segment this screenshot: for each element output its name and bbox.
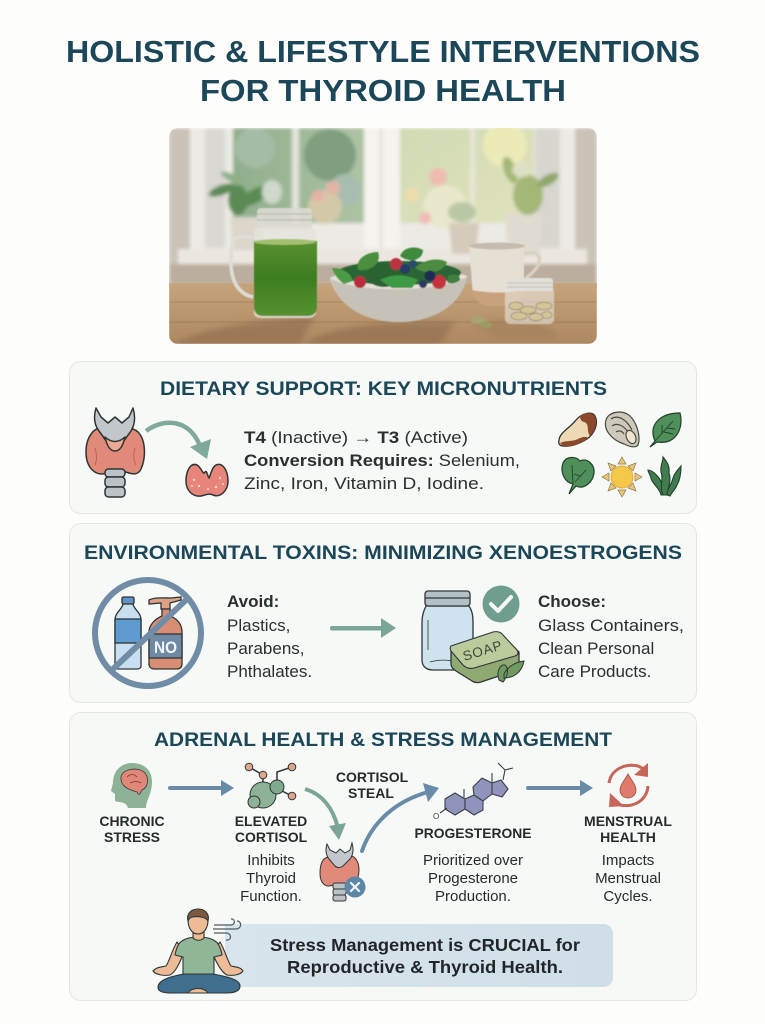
label: elevated cortisol: Inhibits: [247, 852, 295, 869]
arrow: cortisol steal: [362, 783, 439, 851]
panel: environmental toxins: [70, 524, 696, 702]
label: elevated cortisol: CORTISOL: [235, 829, 308, 845]
photo: healthy breakfast table by window: [169, 123, 597, 344]
arrow: progesterone to menstrual: [526, 780, 593, 796]
callout: stress management: [225, 924, 613, 987]
icon: glass jar: [422, 591, 473, 670]
icon: bottle and pump crossed out: [95, 580, 201, 686]
text: choose: Care Products.: [538, 662, 651, 681]
callout: stress management: Stress Management is CRUCIAL for: [270, 935, 580, 955]
icon: soap bar: SOAP: [461, 638, 504, 664]
text: avoid: Avoid:: [227, 592, 279, 611]
icon: leaf: [650, 413, 681, 447]
label: menstrual health: Impacts: [602, 852, 654, 869]
icon: menstrual cycle: [609, 763, 648, 807]
text: conversion: Conversion Requires: Selenium,: [244, 451, 520, 470]
label: menstrual health: [584, 813, 672, 905]
title: FOR THYROID HEALTH: [200, 73, 566, 108]
icon: progesterone molecule: O: [433, 812, 439, 821]
arrow: stress to cortisol: [168, 780, 234, 796]
label: elevated cortisol: ELEVATED: [235, 813, 307, 829]
callout: stress management: Reproductive & Thyroid Health.: [287, 957, 563, 977]
icon: check badge: [482, 586, 520, 622]
icon: breath lines: [213, 919, 241, 940]
text: avoid: Phthalates.: [227, 662, 312, 681]
icon: oyster: [605, 412, 639, 447]
text: choose: Choose:: [538, 592, 606, 611]
label: menstrual health: Cycles.: [603, 888, 653, 905]
label: progesterone: Progesterone: [428, 870, 518, 887]
label: progesterone: Prioritized over: [423, 852, 523, 869]
label: menstrual health: MENSTRUAL: [584, 813, 672, 829]
arrow: T4 to T3: [146, 423, 211, 459]
icon: head with brain: [111, 763, 152, 808]
text: avoid: Plastics,: [227, 616, 290, 635]
icon: bottle and pump crossed out: NO: [154, 638, 177, 657]
icon: progesterone molecule: [433, 763, 513, 821]
icon: spinach: [562, 457, 594, 494]
text: avoid: [227, 592, 312, 681]
text: avoid: Parabens,: [227, 639, 304, 658]
icon: inhibited thyroid: [320, 843, 366, 901]
icon: brazil nut: [559, 413, 596, 447]
title: [66, 34, 700, 108]
text: choose: Glass Containers,: [538, 616, 684, 635]
text: choose: [538, 592, 684, 681]
icon: soap bar: [450, 632, 524, 683]
text: conversion: Zinc, Iron, Vitamin D, Iodine.: [244, 474, 484, 493]
label: elevated cortisol: [235, 813, 308, 905]
heading: dietary support: DIETARY SUPPORT: KEY MICRONUTRIENTS: [160, 378, 607, 400]
text: choose: Clean Personal: [538, 639, 654, 658]
heading: adrenal health: ADRENAL HEALTH & STRESS MANAGEMENT: [154, 729, 612, 751]
panel: adrenal health: [70, 712, 696, 1000]
label: cortisol steal: [336, 769, 409, 801]
heading: environmental toxins: ENVIRONMENTAL TOXINS: MINIMIZING XENOESTROGENS: [84, 542, 682, 564]
label: progesterone: Production.: [435, 888, 511, 905]
label: elevated cortisol: Thyroid: [246, 870, 296, 887]
label: progesterone: [414, 825, 532, 905]
label: cortisol steal: STEAL: [348, 785, 394, 801]
icon: kelp: [648, 457, 681, 496]
label: cortisol steal: CORTISOL: [336, 769, 409, 785]
label: elevated cortisol: Function.: [240, 888, 302, 905]
icon: small thyroid: [186, 464, 228, 496]
panel: dietary support: [70, 362, 696, 514]
arrow: cortisol to thyroid: [305, 789, 346, 840]
icon: meditating person: [153, 909, 243, 993]
label: menstrual health: Menstrual: [595, 870, 661, 887]
label: menstrual health: HEALTH: [600, 829, 656, 845]
text: conversion: T4 (Inactive) → T3 (Active): [244, 428, 468, 447]
arrow: avoid to choose: [330, 618, 396, 638]
icon: cortisol molecule: [245, 763, 296, 808]
label: progesterone: PROGESTERONE: [414, 825, 532, 841]
icon: thyroid with cartilage: [86, 408, 144, 497]
label: chronic stress: CHRONIC: [99, 813, 165, 829]
text: conversion: [244, 428, 520, 493]
label: chronic stress: STRESS: [104, 829, 160, 845]
icon: sun: [602, 457, 642, 497]
title: HOLISTIC & LIFESTYLE INTERVENTIONS: [66, 34, 700, 69]
label: chronic stress: [99, 813, 165, 845]
